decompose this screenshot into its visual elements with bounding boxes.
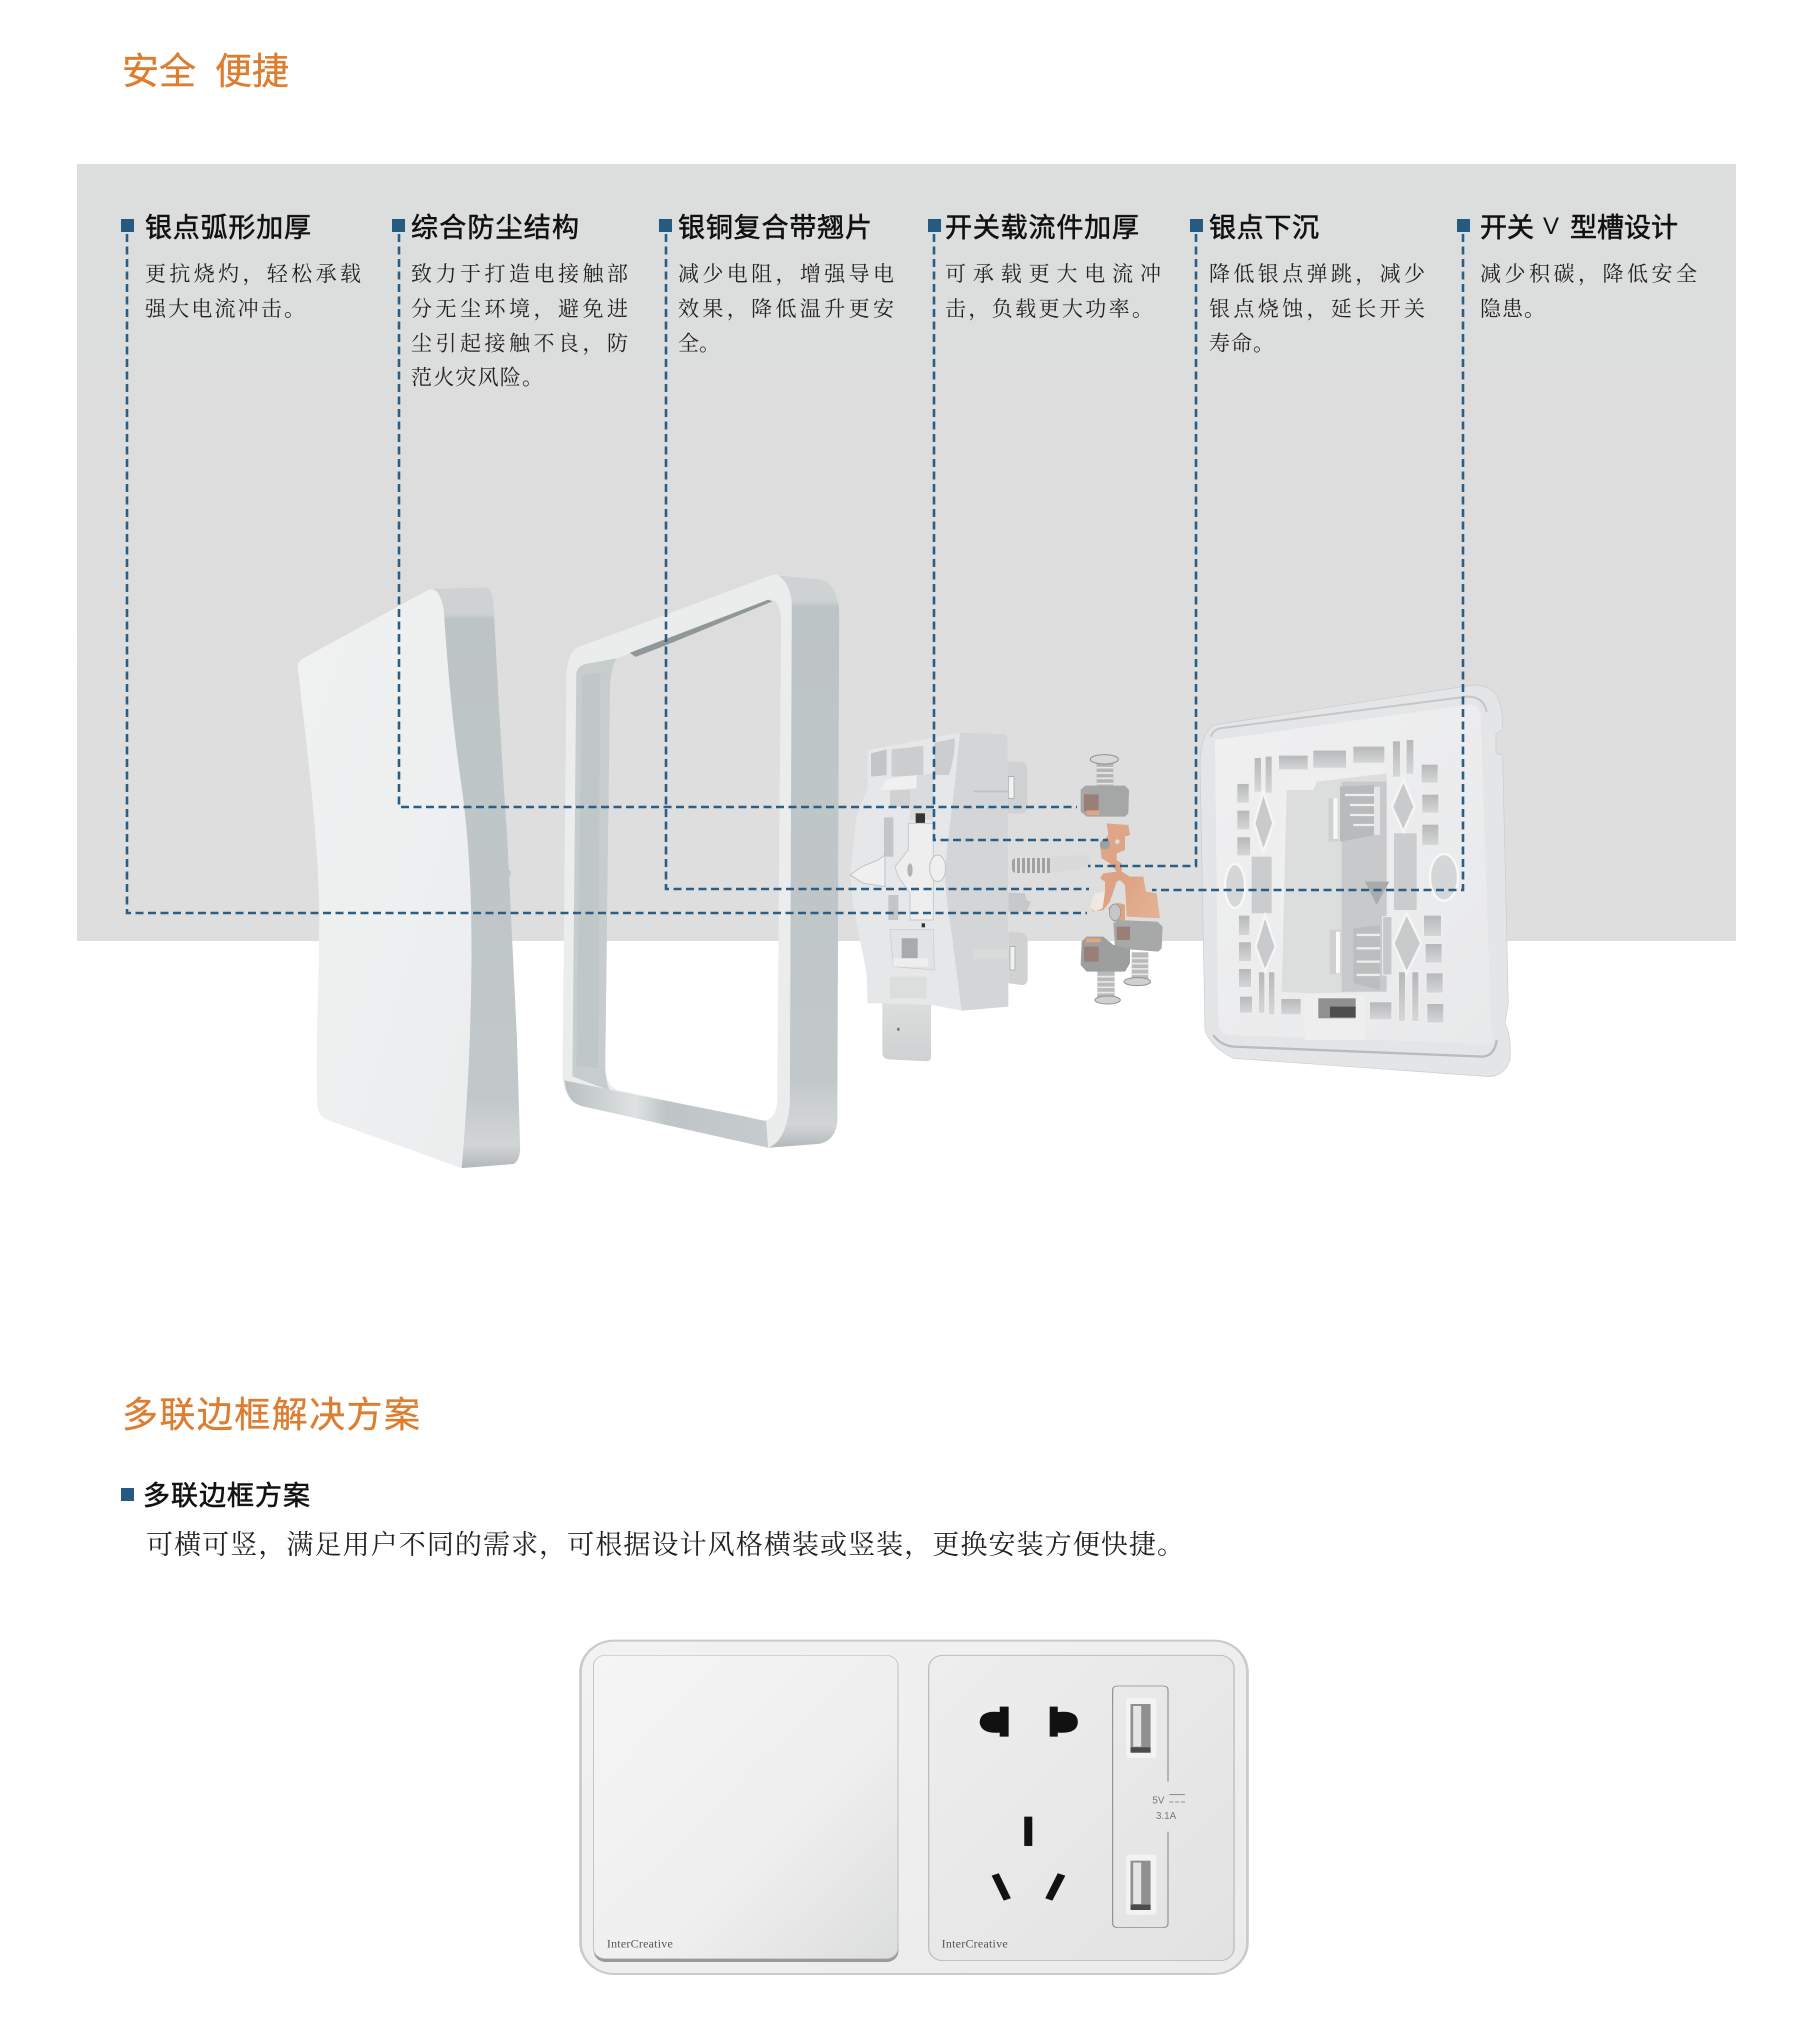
description: [1209, 262, 1425, 356]
heading: 综合防尘结构: [411, 213, 579, 243]
part: front frame: [562, 575, 839, 1148]
heading: 银点弧形加厚: [145, 213, 311, 243]
product photo: double wall plate: [581, 1641, 1247, 1974]
rear tabs: [1008, 762, 1031, 985]
lower clamps: [1081, 920, 1163, 972]
USB module outline: [1113, 1686, 1168, 1928]
bullet: [121, 219, 134, 232]
heading: 型槽设计: [1570, 213, 1678, 243]
feature 6: 开关 V 型槽设计: [1457, 213, 1697, 321]
description: 隐患。: [1480, 297, 1545, 321]
bullet: [121, 1488, 134, 1501]
bullet: [1190, 219, 1203, 232]
icon: USB port bottom: [1126, 1855, 1156, 1915]
description: 致力于打造电接触部: [411, 262, 628, 286]
feature 5: 银点下沉: [1190, 213, 1425, 356]
description: 寿命。: [1209, 332, 1274, 356]
heading: 开关载流件加厚: [945, 213, 1139, 243]
description: 尘引起接触不良，防: [411, 332, 628, 356]
bottom notch: [1305, 995, 1365, 1040]
title: 安全 便捷: 安全: [122, 51, 196, 92]
bullet: [928, 219, 941, 232]
description: 可横可竖: 可横可竖，满足用户不同的需求，可根据设计风格横装或竖装，更换安装方便快捷。: [146, 1530, 1184, 1560]
icon: USB port top: [1126, 1698, 1156, 1758]
USB rating text: 3.1A: [1156, 1811, 1177, 1822]
description: 减少电阻，增强导电: [678, 262, 894, 287]
screw slots: [1225, 854, 1458, 908]
part: switch mechanism body: [850, 733, 1031, 1061]
description: 范火灾风险。: [411, 366, 543, 390]
subsection: 多联边框方案: [121, 1481, 310, 1511]
section heading: 多联边框解决方案: 多联边框解决方案: [122, 1394, 420, 1435]
description: [411, 262, 628, 390]
part: copper conductor and screws: [1081, 755, 1163, 1004]
description: 全。: [678, 332, 720, 356]
subheading: 多联边框方案: [143, 1481, 310, 1511]
heading: V: [1543, 213, 1559, 240]
lower screws: [1095, 952, 1151, 1004]
bullet: [659, 219, 672, 232]
part: back plate: [1200, 685, 1510, 1077]
heading: 银铜复合带翘片: [678, 213, 872, 243]
description: [145, 262, 361, 321]
icon: three-pin holes: [1024, 1817, 1032, 1846]
description: 效果，降低温升更安: [678, 297, 894, 322]
switch rocker: [593, 1655, 898, 1962]
brand label: InterCreative: [607, 1937, 673, 1951]
description: 分无尘环境，避免进: [411, 297, 628, 322]
USB rating text: [1152, 1795, 1185, 1822]
exploded product view: [298, 575, 1510, 1168]
outer frame: [581, 1641, 1247, 1974]
description: 减少积碳，降低安全: [1480, 262, 1697, 287]
description: [945, 262, 1161, 322]
USB rating text: 5V: [1152, 1795, 1165, 1806]
part: switch rocker cover: [298, 588, 520, 1168]
feature 4: 开关载流件加厚: [928, 213, 1161, 322]
lower tongue: [882, 1003, 931, 1061]
top clamp: [1081, 786, 1129, 817]
description: 强大电流冲击。: [145, 297, 305, 321]
description: [1480, 262, 1697, 321]
brand label: InterCreative: [942, 1937, 1008, 1951]
description: 击，负载更大功率。: [945, 297, 1153, 322]
description: 可承载更大电流冲: [945, 262, 1161, 286]
description: 降低银点弹跳，减少: [1209, 262, 1425, 287]
bullet: [1457, 219, 1470, 232]
centre well: [1277, 767, 1392, 993]
heading: 开关: [1480, 213, 1534, 243]
description: 更抗烧灼，轻松承载: [145, 262, 361, 287]
description: [678, 262, 894, 356]
description: 银点烧蚀，延长开关: [1209, 297, 1425, 322]
copper strap: [1089, 823, 1160, 918]
title: 安全 便捷: 便捷: [215, 51, 289, 92]
heading: 银点下沉: [1209, 213, 1319, 243]
feature 1: 银点弧形加厚: [121, 213, 361, 321]
top screw: [1090, 755, 1118, 787]
panel: grey feature background: [77, 164, 1736, 941]
moulded ribs: [1237, 739, 1444, 1023]
part: ground pin spring: [1012, 855, 1090, 873]
bullet: [392, 219, 405, 232]
feature 3: 银铜复合带翘片: [659, 213, 894, 356]
icon: two-pin holes: [980, 1707, 1009, 1737]
callout leader lines: [127, 234, 1463, 913]
feature 2: 综合防尘结构: [392, 213, 628, 390]
socket plate: [929, 1655, 1234, 1961]
